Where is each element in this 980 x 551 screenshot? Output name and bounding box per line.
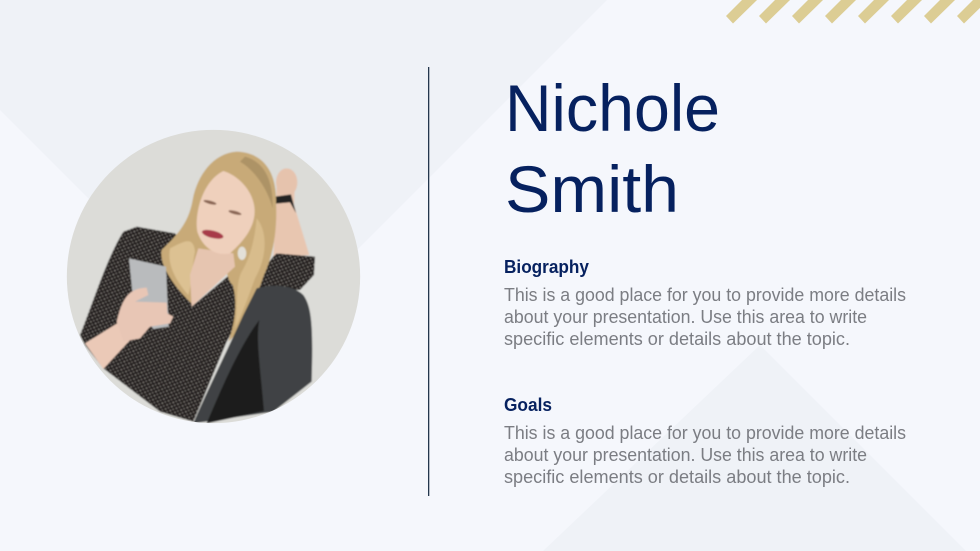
neck and chest xyxy=(190,248,235,307)
eyebrows and eyes xyxy=(203,199,217,206)
phone xyxy=(129,258,169,329)
biography heading: Biography xyxy=(504,257,589,277)
decorative gold stripes xyxy=(726,0,980,24)
goals text: about your presentation. Use this area to write xyxy=(504,445,867,465)
circular portrait photo xyxy=(60,125,370,430)
background shape: bottom-right triangle xyxy=(543,345,966,551)
forearm xyxy=(85,322,132,369)
hand on head xyxy=(276,168,298,191)
face xyxy=(197,171,255,254)
goals heading: Goals xyxy=(504,395,552,415)
biography text: This is a good place for you to provide more details xyxy=(504,285,906,305)
jeans xyxy=(193,286,312,423)
lips xyxy=(201,229,224,240)
shirt xyxy=(80,227,315,422)
title: Nichole xyxy=(505,71,720,145)
earring xyxy=(238,247,246,260)
title xyxy=(505,71,720,226)
section: biography xyxy=(504,257,906,349)
hair highlights xyxy=(169,241,195,295)
title: Smith xyxy=(505,152,679,226)
inner dark leg xyxy=(207,320,264,423)
goals text: This is a good place for you to provide more details xyxy=(504,423,906,443)
hair mass xyxy=(161,152,276,342)
hand holding phone xyxy=(117,288,173,342)
vertical divider line xyxy=(428,67,429,496)
raised arm xyxy=(273,182,309,257)
watch xyxy=(275,194,296,213)
biography text: specific elements or details about the topic. xyxy=(504,329,850,349)
goals text xyxy=(504,423,906,487)
goals text: specific elements or details about the topic. xyxy=(504,467,850,487)
background shape: top-left diamond xyxy=(0,0,607,358)
biography text: about your presentation. Use this area to write xyxy=(504,307,867,327)
section: goals xyxy=(504,395,906,487)
biography text xyxy=(504,285,906,349)
